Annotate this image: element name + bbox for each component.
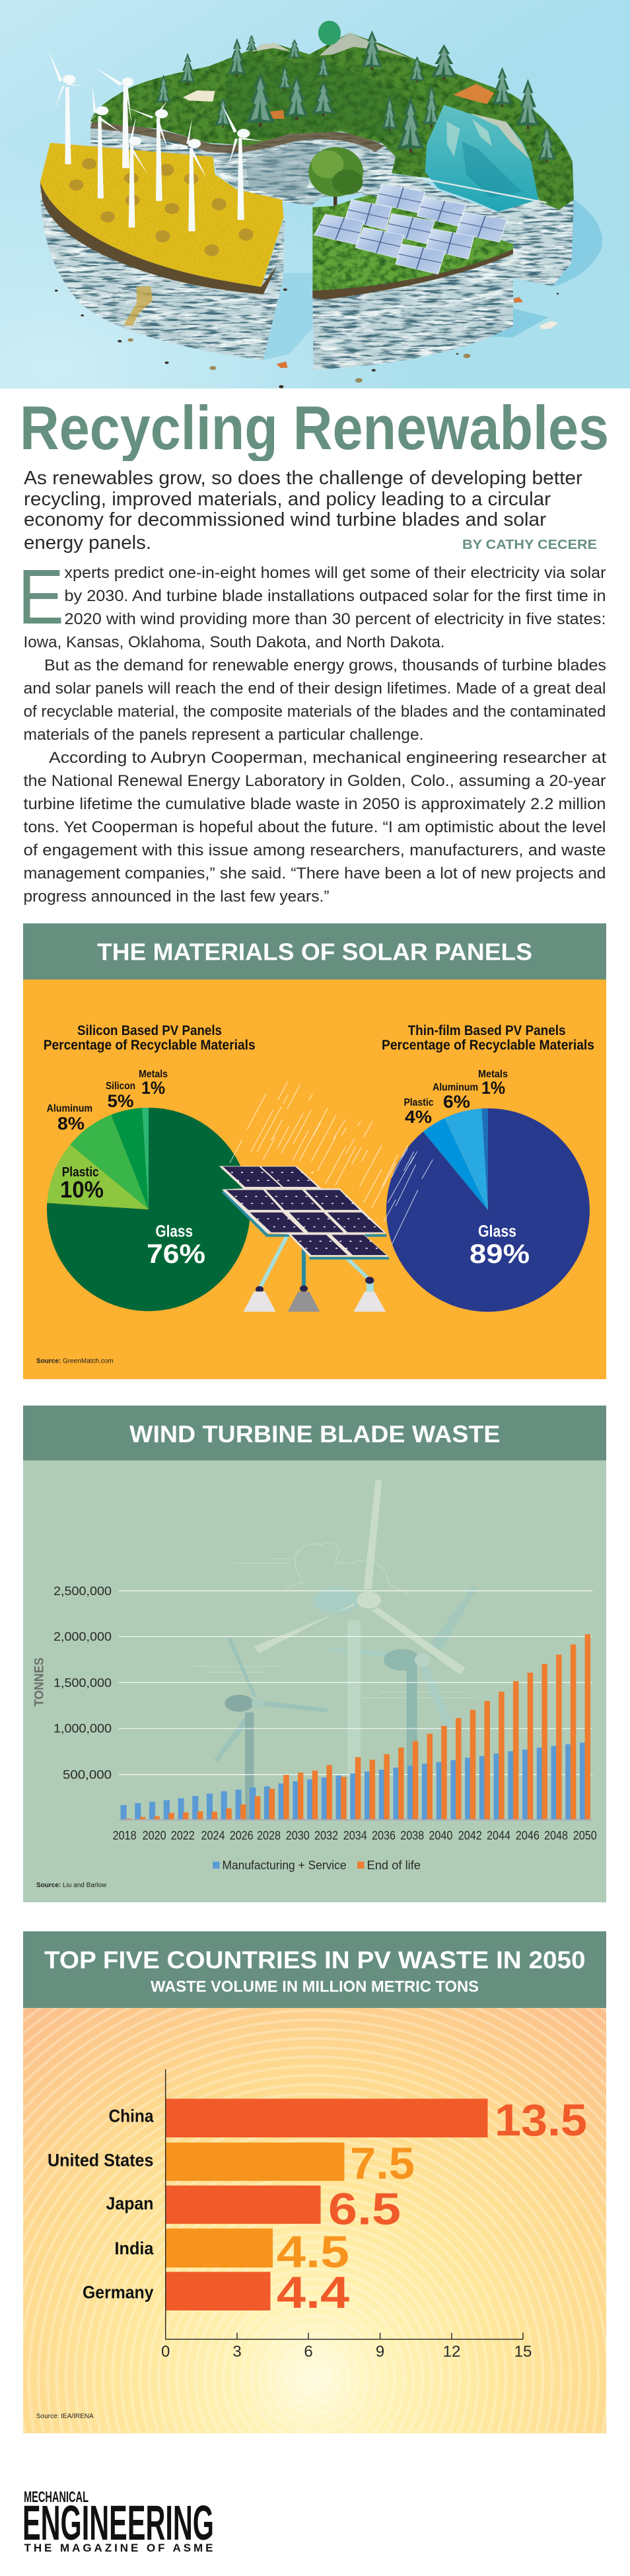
country labels: India bbox=[115, 2238, 154, 2258]
intro text: economy for decommissioned wind turbine blades and solar bbox=[24, 509, 547, 530]
sub-heading: thin-film based bbox=[382, 1023, 594, 1053]
labels: silicon pie slices bbox=[47, 1069, 205, 1269]
bar chart bbox=[119, 1634, 592, 1820]
bar values bbox=[277, 2095, 587, 2318]
legend: End of life bbox=[367, 1859, 421, 1872]
centre turbine bbox=[254, 1479, 466, 1820]
labels: silicon pie slices: Plastic bbox=[62, 1165, 99, 1180]
article paragraphs: of recyclable material, the composite materials of the blades and the contaminated bbox=[24, 703, 606, 721]
x axis labels: 2036 bbox=[372, 1829, 396, 1842]
green hillside with mountains bbox=[90, 33, 574, 210]
x axis numbers: 9 bbox=[376, 2343, 384, 2361]
labels: silicon pie slices: 5% bbox=[107, 1091, 133, 1111]
country labels: United States bbox=[48, 2151, 153, 2170]
labels: thin-film pie slices bbox=[404, 1069, 530, 1269]
labels: silicon pie slices: Silicon bbox=[106, 1081, 135, 1092]
logo: Mechanical Engineering, the magazine of ASME: MECHANICAL bbox=[24, 2488, 88, 2505]
article paragraphs: and solar panels will reach the end of their design lifetimes. Made of a great deal bbox=[24, 680, 606, 698]
article paragraphs: the National Renewal Energy Laboratory in Golden, Colo., assuming a 20-year bbox=[24, 772, 606, 790]
byline: BY CATHY CECERE bbox=[462, 538, 597, 552]
article paragraphs: But as the demand for renewable energy grows, thousands of turbine blades bbox=[44, 657, 606, 674]
x axis labels: 2048 bbox=[544, 1829, 568, 1842]
article paragraphs: progress announced in the last few years.” bbox=[24, 888, 330, 906]
logo: Mechanical Engineering, the magazine of ASME: THE MAGAZINE OF ASME bbox=[24, 2542, 213, 2554]
shadows on the ground bbox=[263, 197, 602, 360]
y axis labels: 2,000,000 bbox=[53, 1630, 112, 1643]
bar values: 7.5 bbox=[350, 2139, 415, 2189]
yellow field with hay bales bbox=[40, 143, 284, 287]
article paragraphs: xperts predict one-in-eight homes will get some of their electricity via solar bbox=[65, 564, 606, 582]
article paragraphs: Iowa, Kansas, Oklahoma, South Dakota, and North Dakota. bbox=[24, 633, 445, 651]
x axis labels: 2044 bbox=[487, 1829, 510, 1842]
heading: solar panel materials bbox=[23, 923, 606, 980]
article body with drop cap bbox=[18, 558, 606, 906]
chart area: two pie charts and solar array bbox=[36, 1023, 594, 1365]
y axis title: TONNES bbox=[33, 1658, 46, 1707]
turquoise lake bbox=[416, 105, 546, 212]
horizontal bar chart bbox=[36, 2069, 587, 2420]
axes and ticks bbox=[166, 2069, 523, 2340]
x axis labels bbox=[113, 1829, 597, 1842]
article paragraphs bbox=[24, 564, 606, 906]
hero illustration: sliced landscape disc with wind turbines and solar panels bbox=[0, 0, 630, 388]
right turbine bbox=[329, 1585, 477, 1820]
country labels bbox=[48, 2106, 154, 2303]
x axis labels: 2042 bbox=[458, 1829, 482, 1842]
labels: thin-film pie slices: 4% bbox=[405, 1107, 432, 1127]
bar values: 4.5 bbox=[277, 2227, 349, 2277]
x axis labels: 2028 bbox=[257, 1829, 281, 1842]
article paragraphs: turbine lifetime the cumulative blade waste in 2050 is approximately 2.2 million bbox=[24, 795, 606, 813]
y axis labels: 500,000 bbox=[63, 1768, 112, 1781]
x axis numbers: 15 bbox=[514, 2343, 532, 2361]
y axis labels bbox=[53, 1585, 112, 1781]
x axis labels: 2020 bbox=[143, 1829, 166, 1842]
article paragraphs: management companies,” she said. “There have been a lot of new projects and bbox=[24, 865, 606, 882]
x axis labels: 2034 bbox=[343, 1829, 367, 1842]
labels: thin-film pie slices: 1% bbox=[481, 1078, 505, 1098]
source note: Source: IEA/IRENA bbox=[36, 2413, 94, 2420]
x axis numbers: 3 bbox=[232, 2343, 242, 2361]
x axis labels: 2022 bbox=[171, 1829, 195, 1842]
sub-heading: thin-film based: Thin-film Based PV Panels bbox=[408, 1023, 566, 1038]
x axis labels: 2032 bbox=[314, 1829, 338, 1842]
article paragraphs: According to Aubryn Cooperman, mechanical engineering researcher at bbox=[49, 749, 606, 767]
labels: thin-film pie slices: Plastic bbox=[404, 1097, 434, 1108]
heading: solar panel materials: THE MATERIALS OF SOLAR PANELS bbox=[97, 939, 532, 966]
broadleaf tree bbox=[308, 147, 363, 212]
background: concentric sun rings bbox=[23, 2008, 606, 2433]
sub-heading: silicon based: Percentage of Recyclable Materials bbox=[44, 1038, 256, 1053]
labels: silicon pie slices: 1% bbox=[141, 1078, 165, 1098]
x axis labels: 2026 bbox=[230, 1829, 254, 1842]
left turbine bbox=[214, 1637, 328, 1820]
legend: Manufacturing + Service bbox=[222, 1859, 346, 1872]
heading: wind turbine blade waste: WIND TURBINE BLADE WASTE bbox=[129, 1421, 501, 1448]
panel: the materials of solar panels bbox=[23, 923, 606, 1379]
yellow wedge rock slice bbox=[40, 182, 285, 360]
heading: wind turbine blade waste bbox=[23, 1406, 606, 1460]
x axis labels: 2018 bbox=[113, 1829, 137, 1842]
heading: top five countries: TOP FIVE COUNTRIES IN PV WASTE IN 2050 bbox=[44, 1947, 585, 1974]
labels: thin-film pie slices: Metals bbox=[478, 1069, 508, 1080]
x axis labels: 2038 bbox=[400, 1829, 424, 1842]
intro text: As renewables grow, so does the challenge of developing better bbox=[24, 468, 583, 489]
labels: silicon pie slices: 8% bbox=[57, 1114, 85, 1133]
labels: silicon pie slices: Aluminum bbox=[47, 1103, 92, 1114]
bars: end of life bbox=[125, 1634, 590, 1820]
panel: top five countries in PV waste in 2050 bbox=[23, 1931, 606, 2433]
x axis labels: 2046 bbox=[516, 1829, 540, 1842]
bars bbox=[166, 2098, 487, 2310]
solar array support legs bbox=[244, 1236, 386, 1312]
article paragraphs: by 2030. And turbine blade installations outpaced solar for the first time in bbox=[65, 587, 606, 605]
x axis labels: 2040 bbox=[429, 1829, 452, 1842]
labels: silicon pie slices: 76% bbox=[147, 1238, 205, 1269]
sub-heading: silicon based: Silicon Based PV Panels bbox=[77, 1023, 222, 1038]
x axis numbers: 6 bbox=[304, 2343, 313, 2361]
article paragraphs: 2020 with wind providing more than 30 percent of electricity in five states: bbox=[65, 610, 606, 628]
labels: silicon pie slices: Glass bbox=[156, 1222, 193, 1240]
article paragraphs: materials of the panels represent a particular challenge. bbox=[24, 726, 424, 744]
x axis labels: 2030 bbox=[286, 1829, 310, 1842]
icon: solar panel array with sun rays bbox=[219, 1082, 433, 1312]
panel: wind turbine blade waste bbox=[23, 1406, 606, 1902]
heading: top five countries bbox=[23, 1931, 606, 2008]
pine trees bbox=[156, 20, 556, 162]
x axis labels: 2050 bbox=[573, 1829, 597, 1842]
x axis numbers: 0 bbox=[161, 2343, 170, 2361]
country labels: China bbox=[108, 2106, 154, 2126]
gridlines bbox=[119, 1591, 592, 1775]
chart text: axes, legend and source bbox=[33, 1585, 597, 1889]
labels: thin-film pie slices: 6% bbox=[443, 1092, 470, 1112]
intro text bbox=[24, 468, 583, 554]
bar values: 6.5 bbox=[328, 2184, 401, 2234]
right green field bbox=[312, 195, 513, 291]
solar panel array bbox=[314, 184, 507, 274]
source note: Source: Liu and Barlow bbox=[36, 1882, 107, 1889]
legend bbox=[213, 1859, 421, 1872]
bar values: 13.5 bbox=[495, 2095, 587, 2145]
intro text: energy panels. bbox=[24, 532, 151, 554]
labels: thin-film pie slices: 89% bbox=[470, 1238, 530, 1269]
scattered stones bbox=[55, 289, 559, 388]
intro text: recycling, improved materials, and policy leading to a circular bbox=[24, 489, 551, 510]
country labels: Japan bbox=[106, 2194, 153, 2213]
labels: thin-film pie slices: Glass bbox=[478, 1222, 516, 1240]
bar values: 4.4 bbox=[277, 2268, 349, 2318]
heading: top five countries: WASTE VOLUME IN MILLION METRIC TONS bbox=[151, 1978, 479, 1995]
country labels: Germany bbox=[83, 2283, 153, 2303]
bars: manufacturing + service bbox=[121, 1742, 586, 1820]
pie chart: silicon based PV panels bbox=[47, 1108, 250, 1311]
back rock walls bbox=[90, 122, 574, 286]
y axis labels: 2,500,000 bbox=[53, 1585, 112, 1598]
article paragraphs: of engagement with this issue among researchers, manufacturers, and waste bbox=[24, 841, 606, 859]
article paragraphs: tons. Yet Cooperman is hopeful about the future. “I am optimistic about the level bbox=[24, 818, 606, 836]
source note: Source: GreenMatch.com bbox=[36, 1358, 114, 1365]
y axis labels: 1,000,000 bbox=[53, 1722, 112, 1735]
x axis numbers bbox=[161, 2343, 532, 2361]
labels: silicon pie slices: 10% bbox=[60, 1177, 104, 1203]
x axis labels: 2024 bbox=[201, 1829, 225, 1842]
pie chart: thin-film based PV panels bbox=[386, 1108, 590, 1312]
labels: silicon pie slices: Metals bbox=[139, 1069, 168, 1080]
illustration: faded wind turbines and cloud bbox=[119, 1480, 593, 1820]
front right rock slice bbox=[312, 249, 513, 369]
solar array panels bbox=[219, 1166, 389, 1258]
x axis numbers: 12 bbox=[443, 2343, 460, 2361]
wind turbines bbox=[48, 51, 263, 231]
sub-heading: silicon based bbox=[44, 1023, 256, 1053]
labels: thin-film pie slices: Aluminum bbox=[433, 1082, 478, 1093]
y axis labels: 1,500,000 bbox=[53, 1676, 112, 1690]
